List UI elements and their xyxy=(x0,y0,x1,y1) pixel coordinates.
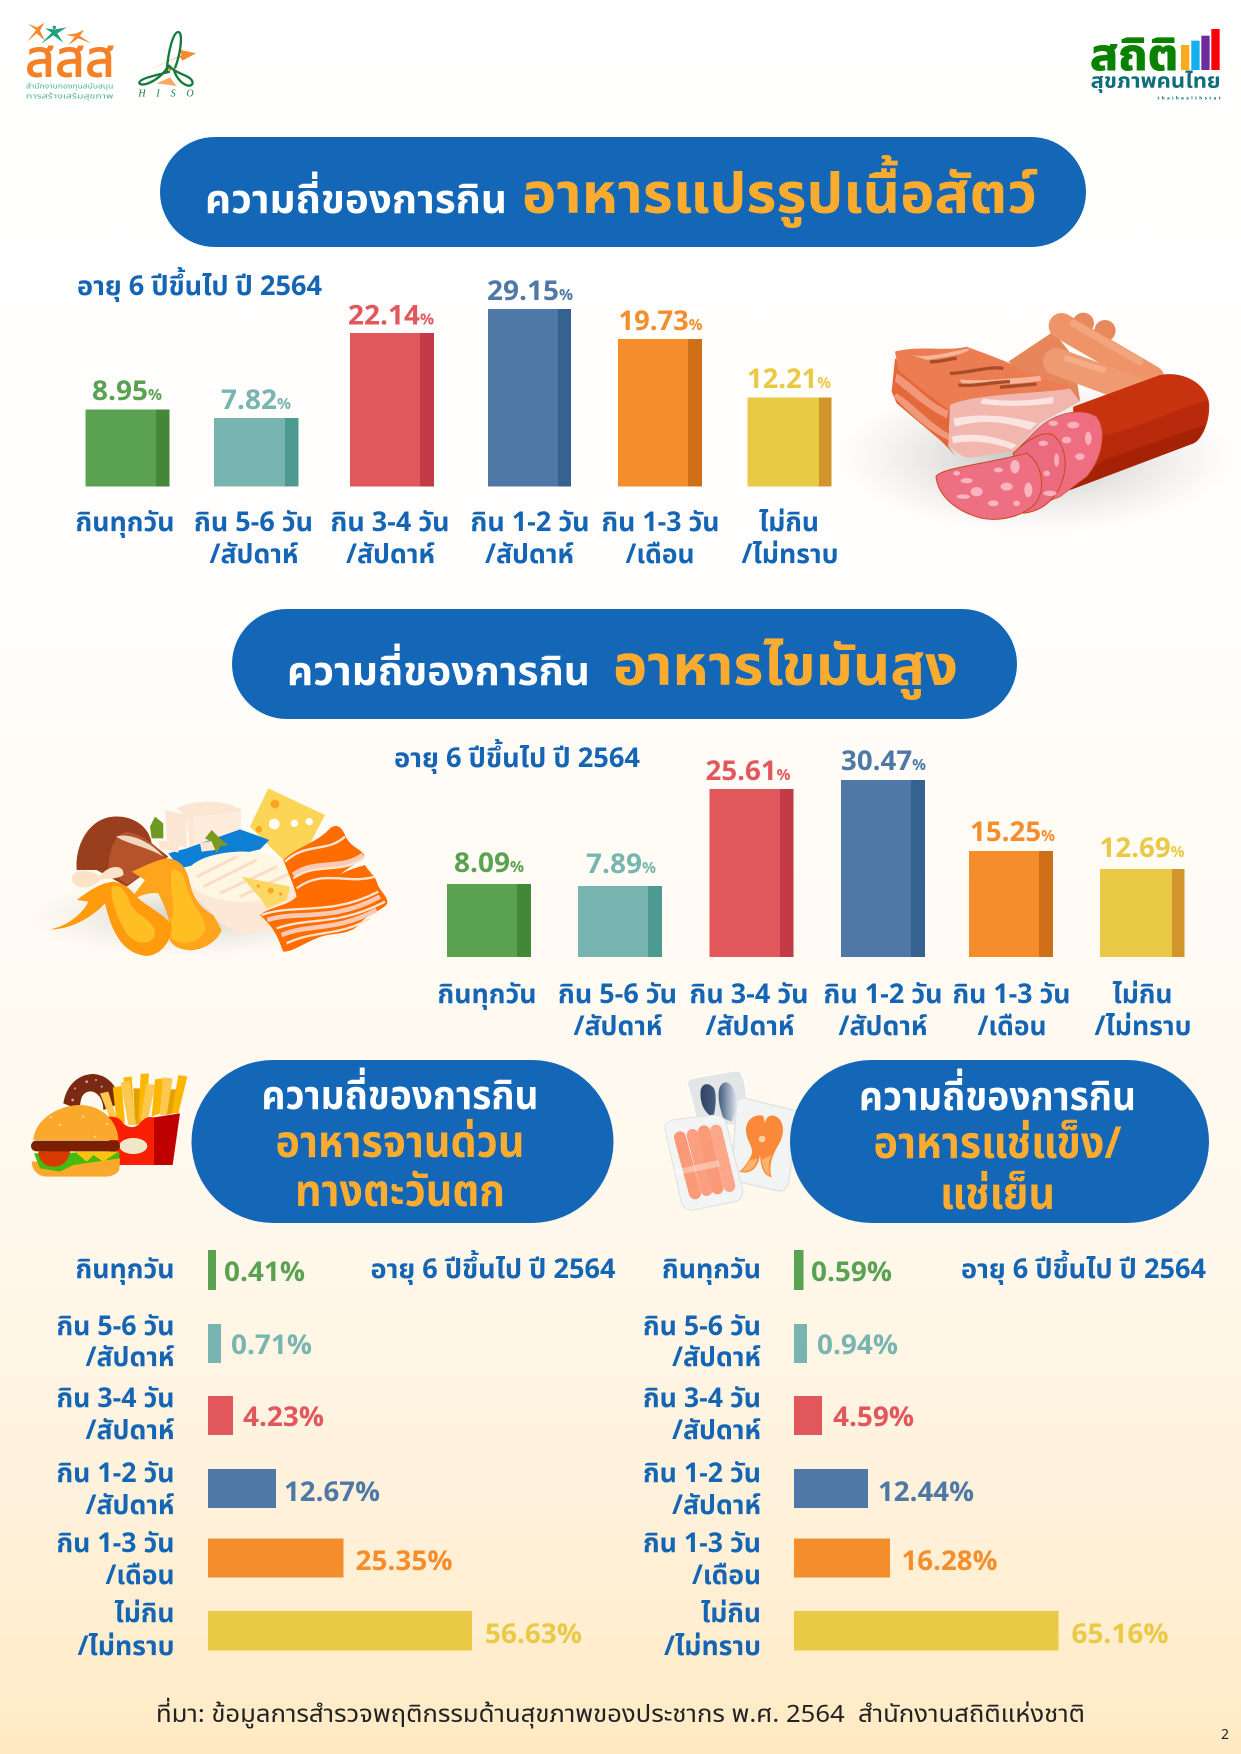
heading: processed meat: ความถี่ของการกิน xyxy=(205,171,507,231)
logo: Thai health stat: สุขภาพคนไทย xyxy=(1091,66,1221,97)
row: 5-6 days 0.94: กิน 5-6 วัน xyxy=(643,1307,761,1348)
row: 1-3 per month 25.35 xyxy=(56,1524,452,1597)
axis labels: /สัปดาห์ xyxy=(485,535,574,576)
age note: อายุ 6 ปีขึ้นไป ปี 2564 xyxy=(961,1250,1206,1291)
axis labels: /สัปดาห์ xyxy=(574,1007,662,1048)
axis labels: กิน 1-3 วัน xyxy=(602,503,720,544)
bar: 3-4 days 25.61 xyxy=(706,752,794,957)
bar: every day 8.95: 8.95% xyxy=(92,372,163,413)
age note: อายุ 6 ปีขึ้นไป ปี 2564 xyxy=(394,739,640,780)
heading: processed meat: อาหารแปรรูปเนื้อสัตว์ xyxy=(522,154,1037,239)
bar: 3-4 days 22.14: 22.14% xyxy=(348,296,435,338)
bar: 5-6 days 7.82 xyxy=(214,381,298,486)
illustration: high-fat foods xyxy=(30,788,387,957)
row: 1-2 days 12.67: กิน 1-2 วัน xyxy=(56,1454,174,1495)
axis labels: กิน 1-3 วัน xyxy=(952,975,1070,1016)
bar: 1-3 per month 15.25: 15.25% xyxy=(970,813,1055,854)
row: every day 0.41: 0.41% xyxy=(224,1253,305,1294)
logo: SSS health promotion foundation: สสส xyxy=(25,23,115,101)
row: 3-4 days 4.59: กิน 3-4 วัน xyxy=(643,1379,761,1420)
bar: 1-3 per month 19.73 xyxy=(618,302,703,486)
heading: processed meat xyxy=(160,137,1086,247)
bar: none 12.21: 12.21% xyxy=(747,360,831,401)
axis labels: /สัปดาห์ xyxy=(706,1007,794,1048)
bar: 1-3 per month 19.73: 19.73% xyxy=(618,302,703,343)
row: 5-6 days 0.71: กิน 5-6 วัน xyxy=(56,1307,174,1348)
row: 1-2 days 12.44: กิน 1-2 วัน xyxy=(643,1454,761,1495)
axis labels: /เดือน xyxy=(978,1007,1046,1048)
panel: fast food horizontal bars xyxy=(56,1250,616,1668)
row: 5-6 days 0.71: 0.71% xyxy=(231,1326,312,1367)
bar: every day 8.09 xyxy=(447,844,531,957)
bar: none 12.69 xyxy=(1100,829,1185,957)
row: 1-3 per month 25.35: กิน 1-3 วัน xyxy=(56,1524,174,1565)
row: none 65.16: ไม่กิน xyxy=(701,1594,761,1635)
illustration: frozen food trays xyxy=(665,1071,799,1210)
row: none 56.63 xyxy=(78,1594,582,1668)
row: every day 0.59 xyxy=(662,1250,892,1294)
axis labels: กิน 5-6 วัน xyxy=(558,975,677,1016)
logo: Thai health stat xyxy=(1090,25,1221,102)
axis labels xyxy=(438,975,1192,1048)
bar: every day 8.95 xyxy=(86,372,170,486)
row: 5-6 days 0.94: 0.94% xyxy=(817,1326,898,1367)
heading: frozen and chilled food: อาหารแช่แข็ง/ xyxy=(874,1111,1122,1178)
heading: high-fat food: ความถี่ของการกิน xyxy=(287,643,590,703)
bar: 3-4 days 25.61: 25.61% xyxy=(706,752,791,793)
axis labels: ไม่กิน xyxy=(1112,975,1172,1016)
row: 5-6 days 0.71: /สัปดาห์ xyxy=(86,1338,174,1379)
logo: Thai health stat: สถิติ xyxy=(1090,25,1178,90)
row: 1-2 days 12.67: /สัปดาห์ xyxy=(86,1486,174,1527)
heading: frozen and chilled food: ความถี่ของการกิน xyxy=(859,1068,1136,1128)
panel: high-fat bar chart xyxy=(394,739,1192,1048)
axis labels: /ไม่ทราบ xyxy=(742,535,838,576)
age note: อายุ 6 ปีขึ้นไป ปี 2564 xyxy=(77,267,322,308)
illustration: processed meats xyxy=(837,313,1237,533)
bar: 1-2 days 30.47 xyxy=(841,742,926,957)
axis labels: /ไม่ทราบ xyxy=(1094,1007,1192,1048)
row: 3-4 days 4.59 xyxy=(643,1379,914,1452)
bar: 1-2 days 29.15: 29.15% xyxy=(487,272,574,313)
axis labels: กิน 3-4 วัน xyxy=(690,975,808,1016)
row: 1-2 days 12.44 xyxy=(643,1454,974,1527)
logo: SSS health promotion foundation: การสร้างเสริมสุขภาพ xyxy=(26,91,113,102)
bar: 1-3 per month 15.25 xyxy=(969,813,1055,957)
row: 3-4 days 4.59: /สัปดาห์ xyxy=(672,1411,761,1452)
panel: frozen food horizontal bars xyxy=(643,1250,1206,1668)
row: every day 0.41: กินทุกวัน xyxy=(76,1250,174,1291)
row: 1-2 days 12.67 xyxy=(56,1454,380,1527)
page number: 2 xyxy=(1221,1725,1229,1746)
row: 3-4 days 4.23: กิน 3-4 วัน xyxy=(56,1379,174,1420)
heading: western fast food: ความถี่ของการกิน xyxy=(262,1067,538,1127)
illustration: fast food xyxy=(31,1073,187,1177)
axis labels: /เดือน xyxy=(626,535,694,576)
panel: processed meat bar chart xyxy=(76,267,838,576)
row: 1-3 per month 16.28: /เดือน xyxy=(692,1556,761,1597)
logo: HISO xyxy=(137,32,196,100)
axis labels: กิน 1-2 วัน xyxy=(824,975,942,1016)
bar: 5-6 days 7.89 xyxy=(578,845,662,957)
row: 5-6 days 0.94 xyxy=(643,1307,898,1379)
heading: high-fat food xyxy=(232,609,1017,719)
axis labels: /สัปดาห์ xyxy=(346,535,435,576)
bar: every day 8.09: 8.09% xyxy=(454,844,525,885)
row: every day 0.41 xyxy=(76,1250,305,1294)
row: 3-4 days 4.23: 4.23% xyxy=(243,1398,324,1439)
axis labels: กินทุกวัน xyxy=(438,975,536,1016)
heading: frozen and chilled food xyxy=(790,1060,1209,1229)
row: 1-3 per month 25.35: 25.35% xyxy=(356,1542,452,1583)
row: none 56.63: ไม่กิน xyxy=(114,1594,174,1635)
heading: western fast food: ทางตะวันตก xyxy=(295,1159,505,1226)
bar: 5-6 days 7.82: 7.82% xyxy=(221,381,292,422)
axis labels xyxy=(76,503,838,576)
axis labels: กิน 5-6 วัน xyxy=(194,503,313,544)
heading: western fast food xyxy=(192,1060,614,1226)
logo: Thai health stat: thaihealthstat xyxy=(1157,95,1221,102)
axis labels: กิน 3-4 วัน xyxy=(330,503,450,544)
axis labels: กินทุกวัน xyxy=(76,503,174,544)
row: 3-4 days 4.23 xyxy=(56,1379,324,1452)
axis labels: /สัปดาห์ xyxy=(210,535,298,576)
row: every day 0.59: 0.59% xyxy=(811,1253,892,1294)
row: none 65.16: /ไม่ทราบ xyxy=(664,1627,761,1668)
row: 1-3 per month 16.28: กิน 1-3 วัน xyxy=(643,1524,761,1565)
bar: none 12.69: 12.69% xyxy=(1100,829,1185,870)
bar: 1-2 days 29.15 xyxy=(487,272,574,486)
heading: high-fat food: อาหารไขมันสูง xyxy=(613,627,958,711)
bar: none 12.21 xyxy=(747,360,832,486)
row: 1-3 per month 16.28 xyxy=(643,1524,998,1597)
row: every day 0.59: กินทุกวัน xyxy=(662,1250,761,1291)
axis labels: ไม่กิน xyxy=(759,503,819,544)
row: 1-3 per month 16.28: 16.28% xyxy=(902,1542,998,1583)
heading: western fast food: อาหารจานด่วน xyxy=(276,1110,524,1177)
source note: ที่มา: ข้อมูลการสำรวจพฤติกรรมด้านสุขภาพของประชากร พ.ศ. 2564 สำนักงานสถิติแห่งชาติ xyxy=(156,1697,1085,1733)
row: none 65.16: 65.16% xyxy=(1072,1615,1168,1656)
age note: อายุ 6 ปีขึ้นไป ปี 2564 xyxy=(370,1250,616,1291)
row: 1-2 days 12.44: 12.44% xyxy=(878,1473,974,1514)
row: none 56.63: /ไม่ทราบ xyxy=(78,1627,174,1668)
row: 5-6 days 0.94: /สัปดาห์ xyxy=(672,1338,761,1379)
row: none 65.16 xyxy=(664,1594,1168,1668)
logo: SSS health promotion foundation: สำนักงานกองทุนสนับสนุน xyxy=(26,81,113,92)
row: 1-2 days 12.67: 12.67% xyxy=(284,1473,380,1514)
bar: 3-4 days 22.14 xyxy=(348,296,435,486)
bar: 1-2 days 30.47: 30.47% xyxy=(841,742,926,783)
axis labels: กิน 1-2 วัน xyxy=(470,503,590,544)
row: 1-2 days 12.44: /สัปดาห์ xyxy=(672,1486,761,1527)
row: none 56.63: 56.63% xyxy=(485,1615,582,1656)
heading: frozen and chilled food: แช่เย็น xyxy=(940,1162,1055,1229)
bar: 5-6 days 7.89: 7.89% xyxy=(586,845,657,886)
logo: HISO: H I S O xyxy=(137,89,194,100)
row: 3-4 days 4.59: 4.59% xyxy=(833,1398,914,1439)
row: 3-4 days 4.23: /สัปดาห์ xyxy=(86,1411,174,1452)
row: 1-3 per month 25.35: /เดือน xyxy=(106,1556,174,1597)
axis labels: /สัปดาห์ xyxy=(838,1007,928,1048)
row: 5-6 days 0.71 xyxy=(56,1307,312,1379)
